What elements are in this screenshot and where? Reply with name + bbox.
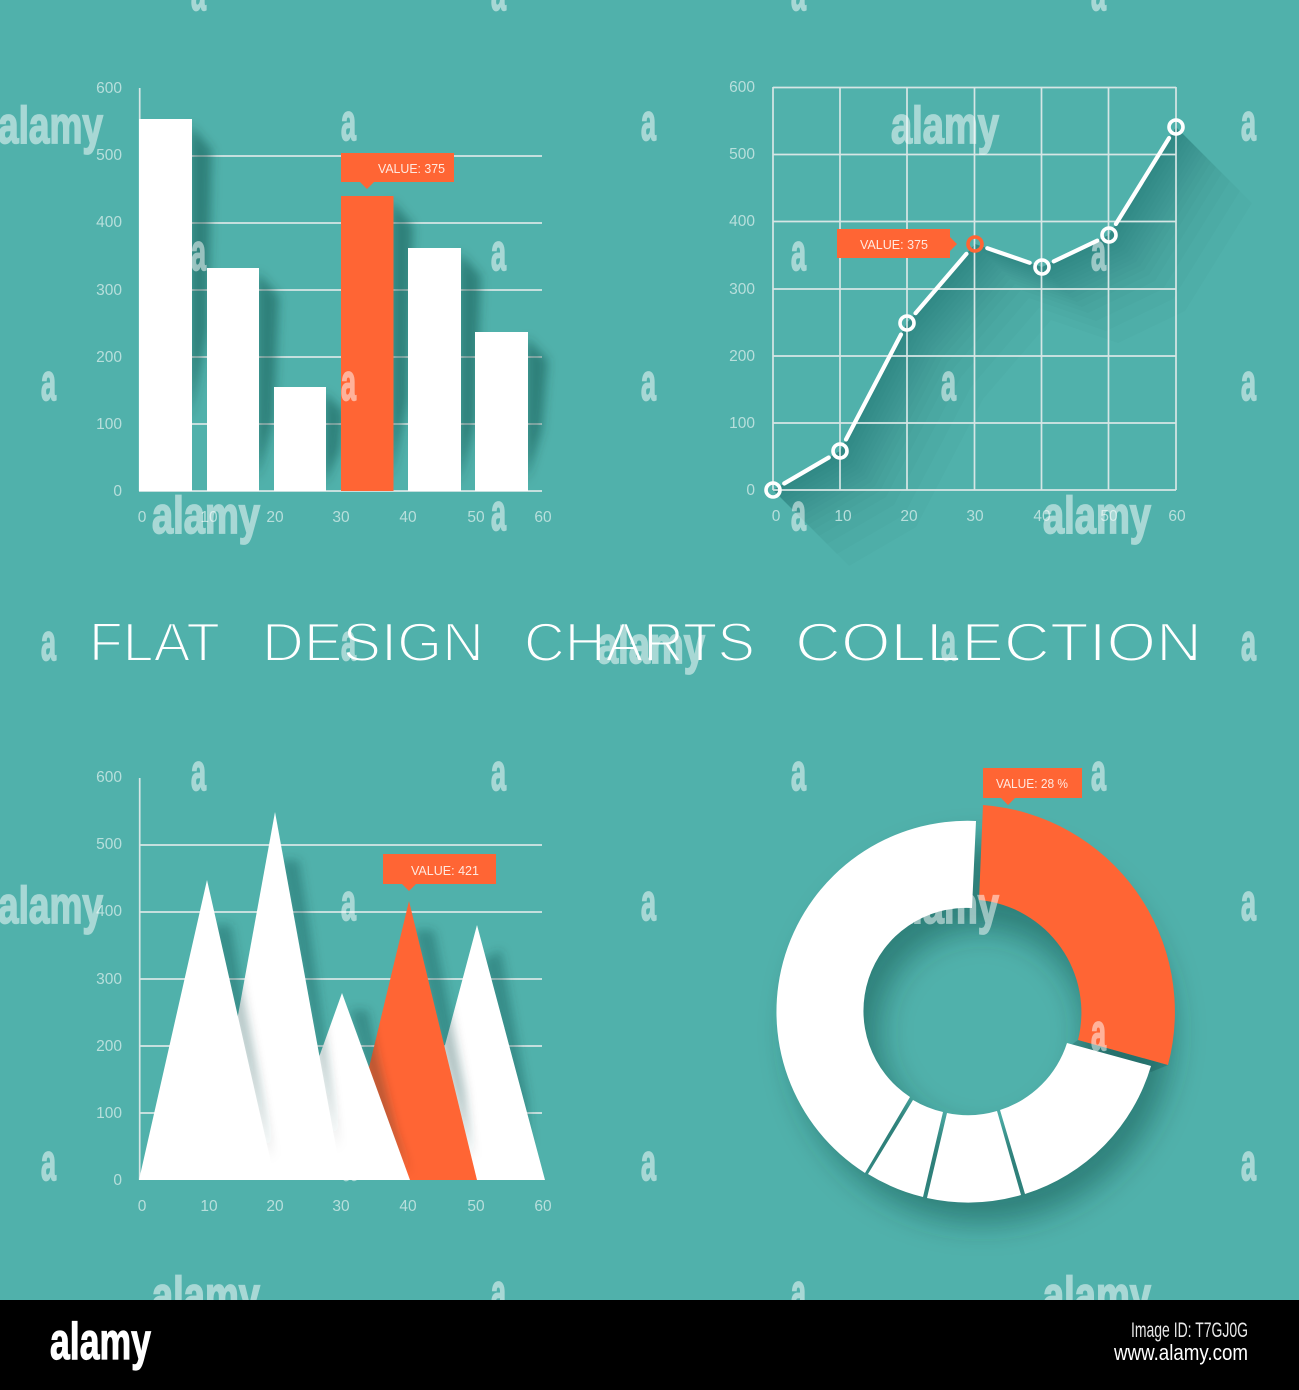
bar chart x axis labels: 30 [332,509,350,526]
bar chart y axis labels: 500 [96,147,122,164]
watermarks: a [191,1004,207,1062]
callout: value 28 percent: VALUE: 28 % [996,776,1068,791]
watermarks: a [491,1264,507,1322]
watermarks: a [941,354,957,412]
triangle chart y axis labels: 0 [113,1172,122,1189]
footer logo: alamy [50,1313,151,1371]
watermarks: a [1091,224,1107,282]
triangle 3 shadow [350,1010,410,1175]
watermarks: a [941,1134,957,1192]
line chart y axis labels: 100 [729,415,755,432]
bar chart y axis labels: 400 [96,214,122,231]
bar chart y axis labels: 600 [96,80,122,97]
donut orange segment shadow [1067,1040,1168,1072]
website: www.alamy.com [1113,1340,1248,1365]
triangle chart gridlines and axis [139,778,542,1180]
triangle 2 shadow [280,860,338,1150]
watermarks: a [191,744,207,802]
triangle 5 shadow [482,950,530,1150]
bar chart y axis labels: 200 [96,349,122,366]
triangle 3 [275,993,410,1180]
watermarks: a [341,614,357,672]
line chart grid [773,87,1176,490]
watermarks: a [41,614,57,672]
callout: value 28 percent [983,768,1082,805]
line chart y axis labels [729,79,755,499]
triangle 2 [208,812,342,1180]
watermarks: alamy [152,487,260,545]
watermarks: a [491,484,507,542]
watermarks: a [641,354,657,412]
watermarks: a [1241,614,1257,672]
callout: value 421: VALUE: 421 [411,863,479,878]
bars [139,119,528,491]
watermarks: a [41,354,57,412]
callout: value 375 [341,153,454,189]
callout: value 375: VALUE: 375 [378,161,445,176]
watermarks: alamy [152,1267,260,1325]
donut segment: large [776,821,976,1173]
bar chart x axis labels: 20 [266,509,284,526]
bar chart x axis labels [138,509,552,526]
triangle chart x axis labels: 20 [266,1198,284,1215]
triangle chart x axis labels: 60 [534,1198,552,1215]
watermarks: alamy [597,617,705,675]
title: CHARTS [524,611,755,673]
line chart x axis labels: 20 [900,508,918,525]
watermarks: a [491,744,507,802]
watermarks: a [791,484,807,542]
title: COLLECTION [795,611,1202,673]
watermarks: a [491,1004,507,1062]
watermarks: a [1241,1134,1257,1192]
bar chart y axis labels: 100 [96,416,122,433]
triangle chart x axis labels: 10 [200,1198,218,1215]
triangle chart y axis labels: 200 [96,1038,122,1055]
title [89,611,1202,673]
watermarks: a [641,94,657,152]
bar chart x axis labels: 10 [200,509,218,526]
triangle chart x axis labels: 50 [467,1198,485,1215]
bar chart y axis labels [96,80,122,500]
line chart x axis labels [772,508,1186,525]
watermarks: alamy [1043,1267,1151,1325]
triangle chart x axis labels: 0 [138,1198,147,1215]
watermarks: a [41,1134,57,1192]
watermarks: a [191,224,207,282]
title: FLAT [89,611,220,673]
triangle 4 shadow [414,930,472,1160]
line chart y axis labels: 500 [729,146,755,163]
triangle chart x axis labels [138,1198,552,1215]
line chart x axis labels: 0 [772,508,781,525]
triangle chart y axis labels: 400 [96,903,122,920]
watermarks: a [791,744,807,802]
watermarks: a [1091,1004,1107,1062]
line chart y axis labels: 200 [729,348,755,365]
triangle 4 [342,901,477,1180]
bar chart y axis labels: 300 [96,282,122,299]
panel: line chart [730,81,1230,544]
triangle 1 shadow [212,925,272,1160]
line chart x axis labels: 30 [966,508,984,525]
triangle chart x axis labels: 40 [399,1198,417,1215]
donut segment: medium [927,1111,1021,1202]
donut segment: small [868,1100,943,1197]
watermarks: a [491,224,507,282]
watermarks: a [641,874,657,932]
watermarks: a [341,1134,357,1192]
bar chart x axis labels: 40 [399,509,417,526]
line chart y axis labels: 300 [729,281,755,298]
watermarks: a [1241,874,1257,932]
triangle 1 [139,880,275,1180]
triangle chart y axis labels [96,769,122,1189]
panel: triangle chart [96,769,552,1215]
data line segments [784,138,1169,484]
bar chart x axis labels: 0 [138,509,147,526]
watermarks: a [1091,744,1107,802]
line chart x axis labels: 60 [1168,508,1186,525]
line chart x axis labels: 10 [834,508,852,525]
bar chart gridlines and axis [139,88,542,491]
watermarks: a [341,94,357,152]
long shadow under line [774,128,1230,544]
callout: value 421 [383,854,496,891]
line chart y axis labels: 600 [729,79,755,96]
triangle chart y axis labels: 300 [96,971,122,988]
donut shadow [791,841,1173,1223]
watermarks: a [341,354,357,412]
line chart y axis labels: 0 [746,482,755,499]
triangle chart x axis labels: 30 [332,1198,350,1215]
bar chart x axis labels: 60 [534,509,552,526]
bar chart y axis labels: 0 [113,483,122,500]
watermarks: alamy [891,877,999,935]
watermarks: a [1241,354,1257,412]
line chart x axis labels: 50 [1100,508,1118,525]
watermarks: a [791,224,807,282]
donut segment: orange highlight [979,805,1175,1065]
donut segment: wide [1000,1043,1151,1194]
watermarks: alamy [1043,487,1151,545]
data points [766,120,1183,497]
watermarks: alamy [891,97,999,155]
triangle chart y axis labels: 100 [96,1105,122,1122]
triangle 5 [409,925,545,1180]
callout: value 375 [837,229,957,258]
bar shadows [190,125,548,485]
bar chart x axis labels: 50 [467,509,485,526]
triangle chart y axis labels: 600 [96,769,122,786]
panel: bar chart [96,80,552,526]
watermarks: a [641,1134,657,1192]
panel: donut chart [776,768,1175,1223]
watermarks: a [791,1264,807,1322]
line chart x axis labels: 40 [1033,508,1051,525]
watermarks: alamy [0,97,103,155]
triangle chart y axis labels: 500 [96,836,122,853]
watermarks: a [791,1004,807,1062]
watermarks: a [941,614,957,672]
footer bar [0,1300,1299,1390]
watermarks: a [341,874,357,932]
title: DESIGN [262,611,484,673]
line chart y axis labels: 400 [729,213,755,230]
watermarks: alamy [0,877,103,935]
watermarks: a [1241,94,1257,152]
callout: value 375: VALUE: 375 [860,237,928,252]
